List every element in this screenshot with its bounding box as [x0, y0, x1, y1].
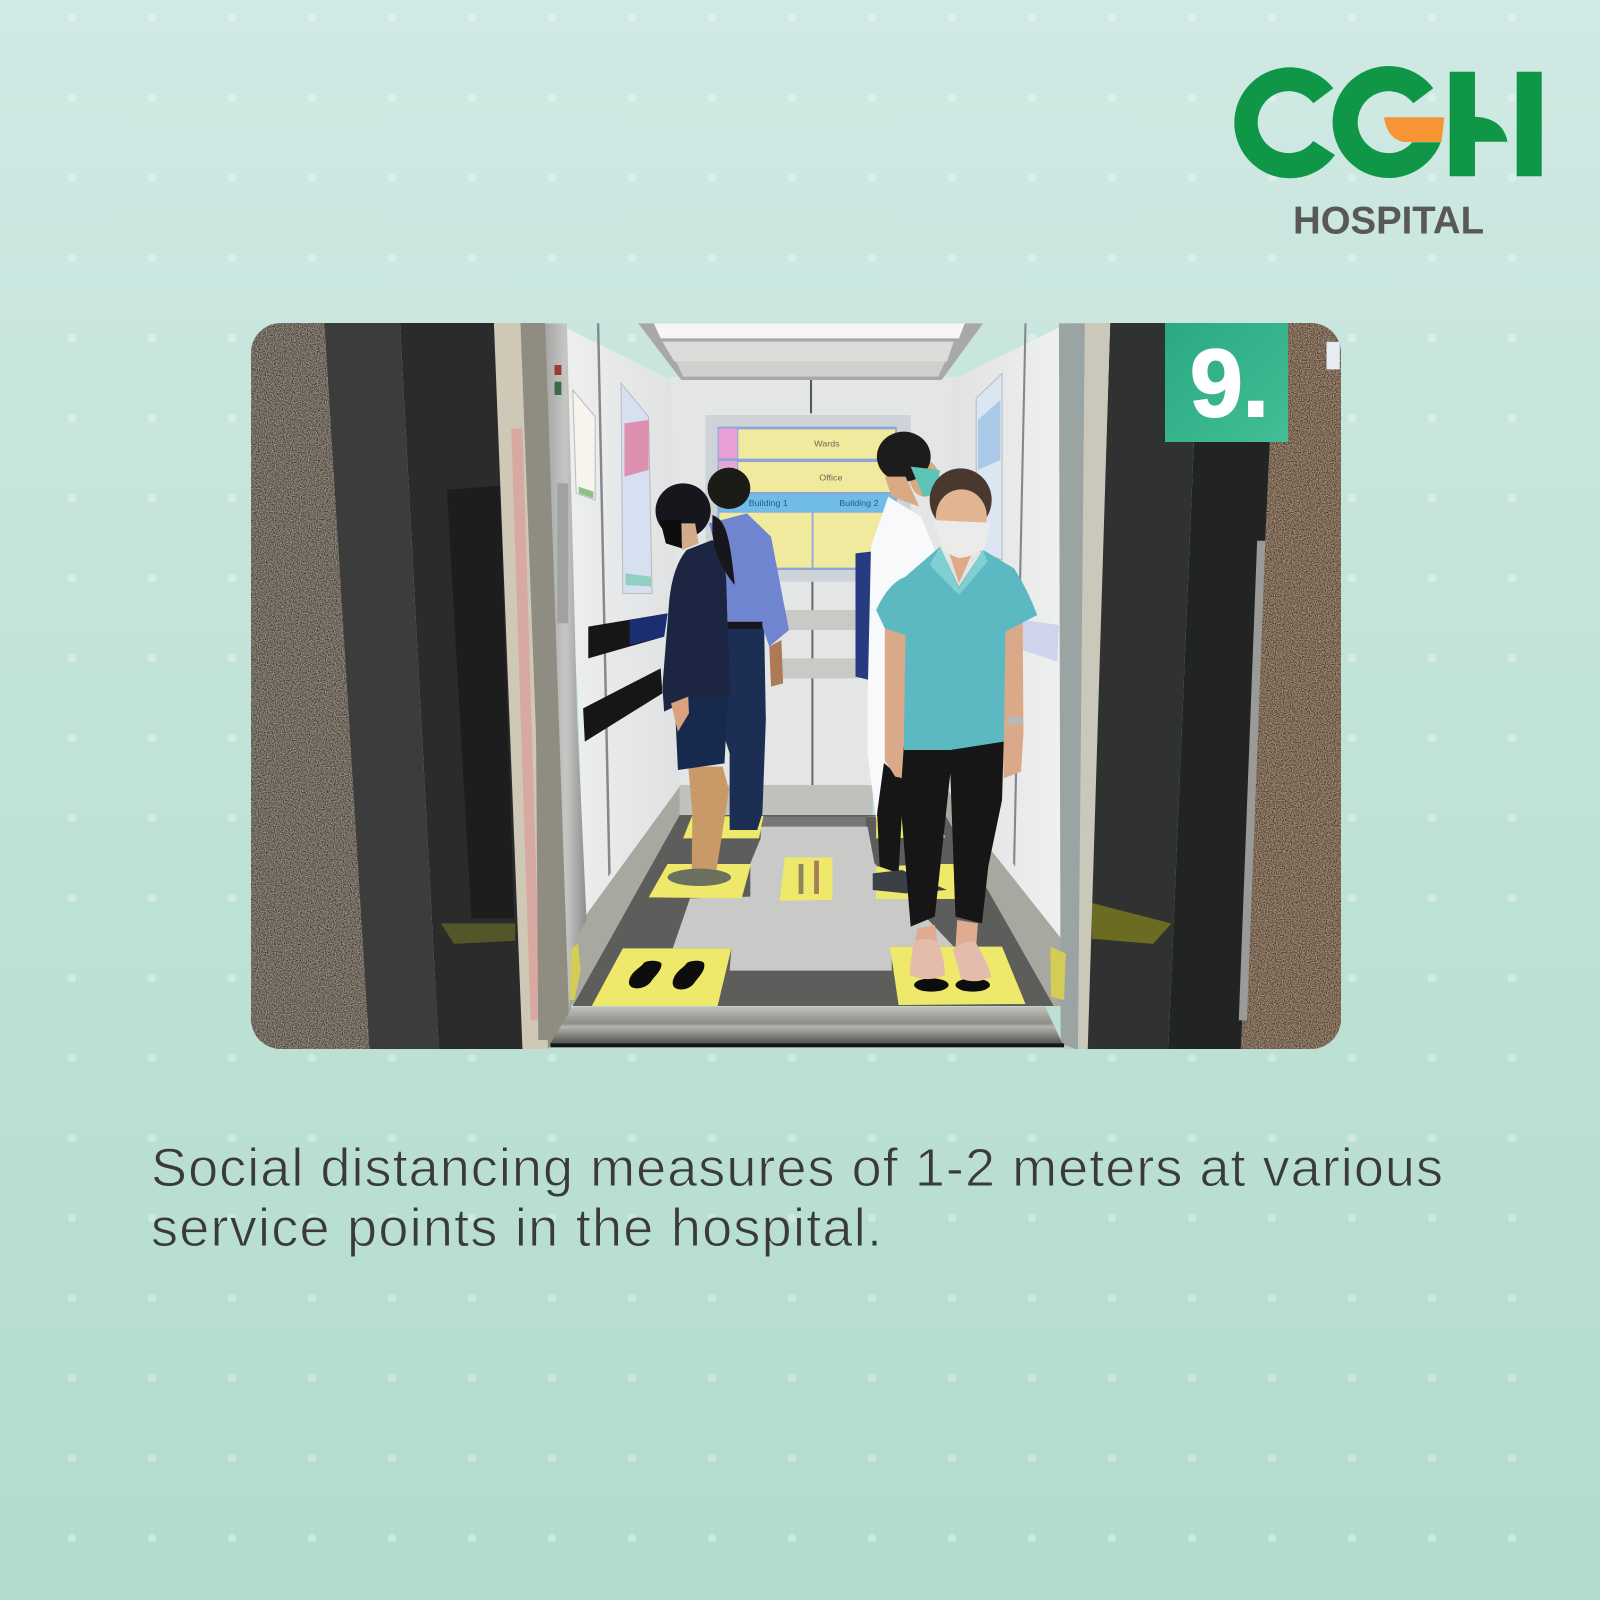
logo letter G	[1333, 66, 1441, 178]
person: doctor in white coat	[855, 432, 947, 893]
yellow floor markers	[592, 816, 1025, 1006]
footprint right	[673, 961, 704, 990]
directory sign	[706, 415, 911, 582]
caption text: service points in the hospital.	[151, 1198, 882, 1258]
directory sign: Office	[819, 472, 843, 482]
logo orange bowl	[1384, 117, 1444, 142]
ceiling	[638, 323, 983, 380]
caption text	[151, 1138, 1443, 1258]
wall posters	[573, 390, 595, 500]
person: woman in teal polo facing forward	[876, 468, 1037, 992]
number badge: 9.: 9.	[1190, 330, 1269, 437]
person: man in blue shirt	[708, 468, 789, 830]
handrails	[588, 613, 668, 658]
photo: people standing on floor markers in a hospital elevator	[251, 322, 1347, 1050]
caption text: Social distancing measures of 1-2 meters at various	[151, 1138, 1443, 1198]
logo letter H	[1450, 72, 1542, 176]
logo: CGH Hospital	[1234, 66, 1542, 242]
footprint left	[629, 961, 662, 988]
left door plate with buttons	[545, 323, 587, 1023]
left wall	[557, 323, 680, 917]
back wall	[669, 377, 955, 790]
logo word HOSPITAL: HOSPITAL	[1293, 200, 1484, 242]
elevator interior	[533, 323, 1085, 1050]
threshold	[550, 1007, 1062, 1043]
person: woman in navy	[656, 483, 735, 886]
right wall	[948, 328, 1060, 938]
directory sign labels: Wards	[814, 439, 840, 449]
directory sign: Building 2	[839, 498, 879, 508]
right door plate	[1059, 323, 1085, 1050]
elevator lobby frame	[251, 322, 1347, 1049]
floor	[573, 815, 1054, 1006]
logo letter C	[1234, 67, 1335, 178]
floor sign text strokes	[799, 864, 803, 894]
directory sign: Building 1	[749, 498, 788, 508]
number badge: 9.	[1165, 323, 1288, 442]
